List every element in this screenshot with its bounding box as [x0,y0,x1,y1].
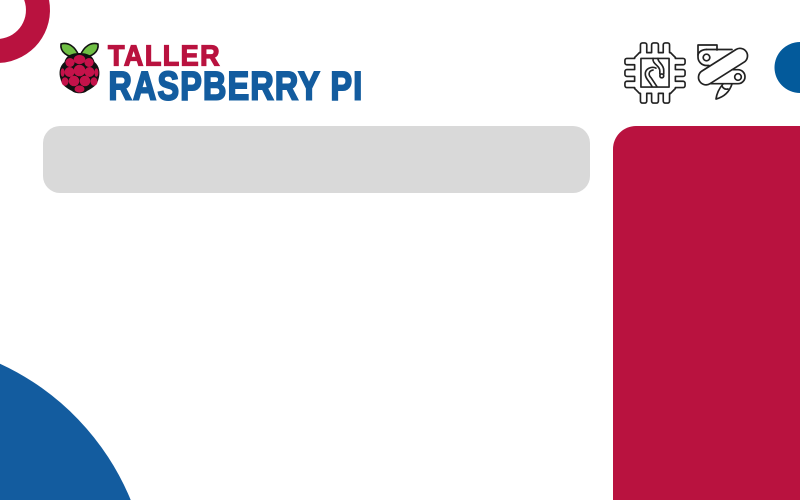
decorative circle: top-right blue [775,42,800,93]
panel: red side panel [613,126,800,500]
title: RASPBERRY PI: RASPBERRY PI [108,64,364,108]
title: TALLER: TALLER [108,40,221,72]
icon: microchip [625,43,685,103]
icon: multitool knife [698,45,748,99]
decorative circle: bottom-left blue [0,364,131,500]
panel: grey header bar [43,126,590,193]
icon: raspberry logo [60,44,99,93]
decorative ring: top-left [0,0,50,63]
